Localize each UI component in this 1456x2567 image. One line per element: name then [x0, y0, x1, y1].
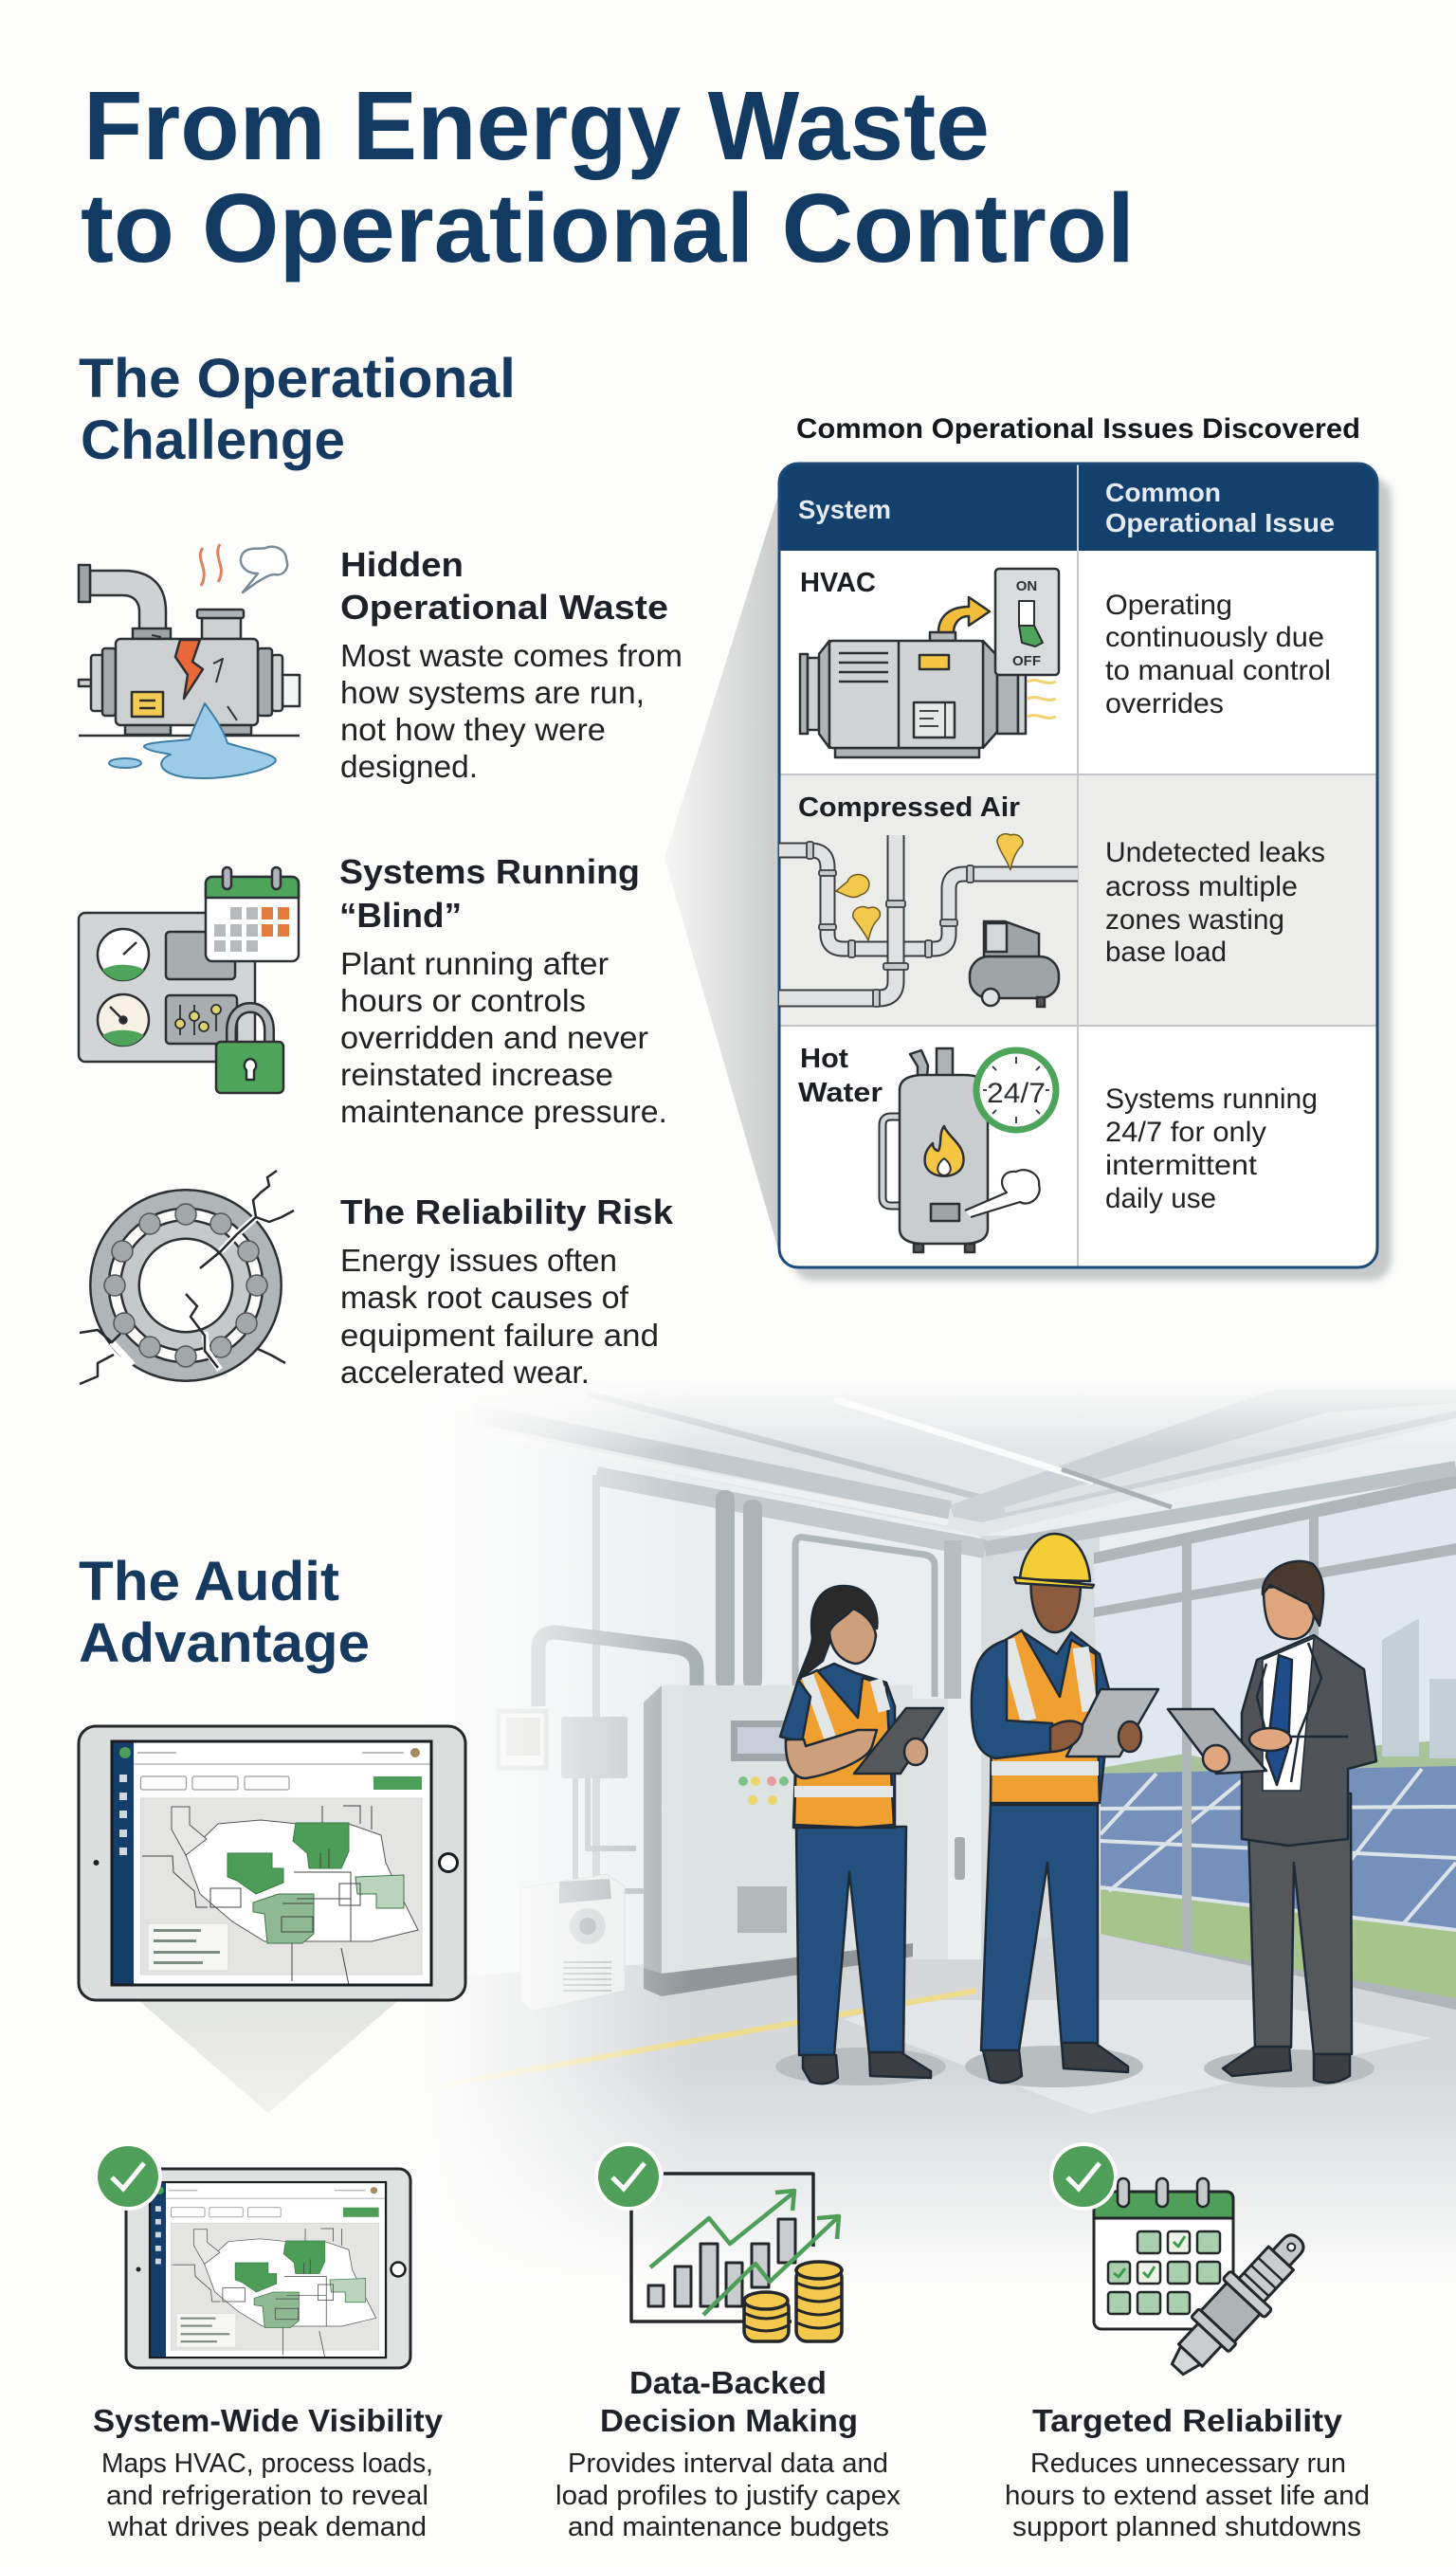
item: systems running blind: reinstated increase [340, 1057, 613, 1092]
benefit: targeted reliability: hours to extend asset life and [1005, 2481, 1370, 2511]
row: compressed air: across multiple [1105, 871, 1298, 902]
table heading: Common Operational Issues Discovered [796, 413, 1360, 445]
benefit: data-backed decision making: Data-Backed [629, 2365, 827, 2400]
item: the reliability risk [340, 1192, 674, 1390]
row: compressed air: Compressed Air [798, 792, 1020, 823]
icon: control panel with calendar and lock [79, 867, 299, 1093]
benefit: targeted reliability: support planned shutdowns [1012, 2512, 1361, 2542]
row: hot water: 24/7 for only [1105, 1117, 1266, 1148]
badge: check [1049, 2142, 1118, 2211]
icon: leaking pump [79, 544, 300, 778]
worker: man in hard hat with tablet [965, 1534, 1158, 2087]
icon: chart with coins [631, 2174, 842, 2341]
illustration: plant room with audit team [408, 1375, 1456, 2294]
badge: check [94, 2142, 162, 2211]
row: hot water: daily use [1105, 1183, 1216, 1214]
row: compressed air: base load [1105, 937, 1227, 968]
heading: the audit advantage: Advantage [79, 1612, 370, 1674]
benefit: data-backed decision making [555, 2142, 901, 2542]
icon: water heater with 24/7 clock [883, 1048, 1056, 1252]
heading: the operational challenge [79, 348, 516, 471]
worker: woman with tablet [775, 1586, 946, 2085]
item: the reliability risk: Energy issues often [340, 1243, 617, 1278]
row: HVAC: continuously due [1105, 622, 1324, 653]
benefit: targeted reliability: Reduces unnecessary run [1030, 2449, 1346, 2479]
table header: Operational Issue [1105, 508, 1335, 537]
icon: calendar with spark plug [1094, 2178, 1320, 2389]
icon: water heater with 24/7 clock: 24/7 [987, 1078, 1046, 1109]
item: hidden operational waste: not how they were [340, 712, 606, 747]
item: systems running blind: overridden and never [340, 1020, 648, 1055]
heading: the audit advantage [79, 1551, 370, 1674]
arrow: funnel pointer [139, 2001, 397, 2113]
row: compressed air: Undetected leaks [1105, 837, 1325, 868]
badge: check [594, 2142, 663, 2211]
panel: common operational issues table [777, 413, 1392, 1281]
table header: System [798, 495, 891, 524]
title [81, 71, 1135, 282]
item: systems running blind: Systems Running [339, 852, 640, 891]
benefit: system-wide visibility: what drives peak demand [107, 2512, 427, 2542]
row: HVAC: to manual control [1105, 655, 1331, 686]
callout wedge [664, 483, 782, 1263]
benefit: system-wide visibility: Maps HVAC, process loads, [101, 2449, 433, 2479]
table header: Common [1105, 478, 1221, 507]
heading: the operational challenge: The Operational [79, 348, 516, 410]
item: systems running blind [339, 852, 667, 1129]
benefit: data-backed decision making: and maintenance budgets [568, 2512, 889, 2542]
row: compressed air [777, 792, 1325, 1007]
item: systems running blind: “Blind” [339, 896, 462, 935]
item: the reliability risk: equipment failure and [340, 1318, 659, 1353]
row: HVAC: Operating [1105, 590, 1232, 621]
item: hidden operational waste: Operational Waste [340, 588, 668, 627]
tablet: facility energy map dashboard [79, 1726, 465, 2000]
row: hot water: Water [798, 1078, 883, 1108]
item: the reliability risk: accelerated wear. [340, 1355, 590, 1390]
table header [779, 464, 1377, 551]
item: hidden operational waste [340, 545, 682, 784]
icon: HVAC unit with switch: ON [1016, 578, 1037, 594]
heading: the audit advantage: The Audit [79, 1551, 339, 1612]
item: the reliability risk: The Reliability Risk [340, 1192, 674, 1231]
benefit: data-backed decision making: Provides interval data and [568, 2449, 888, 2479]
row: HVAC: HVAC [800, 568, 876, 598]
item: systems running blind: maintenance pressure. [340, 1094, 667, 1129]
row: hot water [798, 1044, 1318, 1252]
title: to Operational Control [81, 173, 1135, 282]
heading: the operational challenge: Challenge [81, 410, 345, 471]
benefit: system-wide visibility: and refrigeration to reveal [106, 2481, 428, 2511]
row: HVAC [800, 568, 1331, 757]
row: hot water: intermittent [1105, 1150, 1258, 1181]
benefit: targeted reliability: Targeted Reliability [1032, 2403, 1343, 2438]
item: hidden operational waste: how systems are run, [340, 675, 645, 710]
background room [408, 1375, 1456, 2294]
row: compressed air: zones wasting [1105, 904, 1284, 936]
item: the reliability risk: mask root causes of [340, 1280, 629, 1315]
row: HVAC: overrides [1105, 688, 1224, 719]
benefit: system-wide visibility [93, 2142, 444, 2542]
person: manager in suit with tablet [1168, 1561, 1376, 2087]
icon: HVAC unit with switch: OFF [1012, 653, 1041, 669]
panel: the operational challenge [79, 348, 682, 1390]
item: hidden operational waste: Most waste comes from [340, 638, 682, 673]
row: hot water: Hot [800, 1044, 848, 1074]
benefit: data-backed decision making: load profiles to justify capex [555, 2481, 901, 2511]
icon: HVAC unit with switch [800, 569, 1059, 757]
item: hidden operational waste: Hidden [340, 545, 464, 584]
title: From Energy Waste [83, 71, 990, 180]
item: systems running blind: hours or controls [340, 983, 586, 1018]
item: systems running blind: Plant running after [340, 946, 609, 981]
benefit: data-backed decision making: Decision Making [600, 2403, 858, 2438]
item: hidden operational waste: designed. [340, 749, 478, 784]
icon: cracked bearing [80, 1171, 294, 1384]
icon: tablet with map [126, 2169, 410, 2368]
benefit: system-wide visibility: System-Wide Visibility [93, 2403, 444, 2438]
benefit: targeted reliability [1005, 2142, 1370, 2542]
panel: the audit advantage [79, 1551, 1370, 2542]
row: hot water: Systems running [1105, 1083, 1318, 1115]
icon: leaking pipes and compressor [777, 834, 1081, 1007]
